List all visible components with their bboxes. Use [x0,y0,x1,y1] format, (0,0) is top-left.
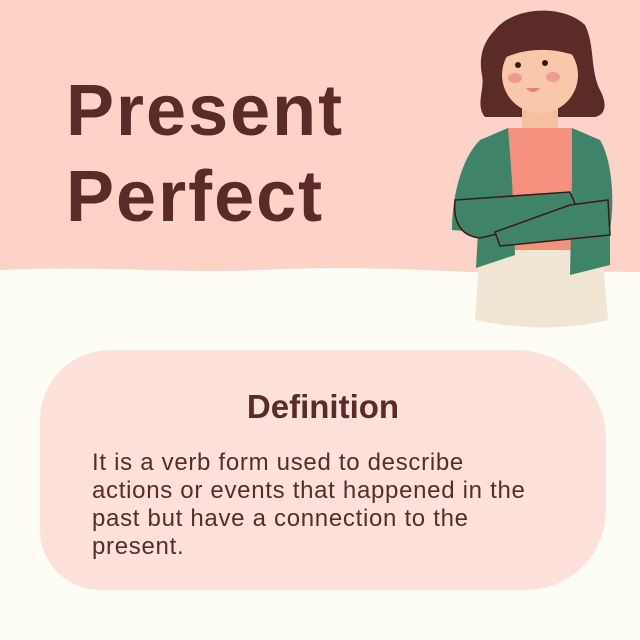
illustration: woman [452,10,612,328]
definition text: It is a verb form used to describe [92,449,464,476]
skirt [475,250,608,328]
title [66,71,344,237]
definition heading: Definition [247,388,399,425]
title: Present [66,71,344,151]
definition text: past but have a connection to the [92,505,469,532]
definition text: present. [92,533,184,560]
shirt [502,128,575,250]
jacket [452,128,515,268]
hair back [480,11,605,117]
bangs [500,28,580,58]
face [502,37,578,113]
title: Perfect [66,157,324,237]
definition text [92,449,526,560]
arms [455,192,580,238]
definition text: actions or events that happened in the [92,477,526,504]
panel: definition [40,350,606,590]
neck [522,100,558,132]
